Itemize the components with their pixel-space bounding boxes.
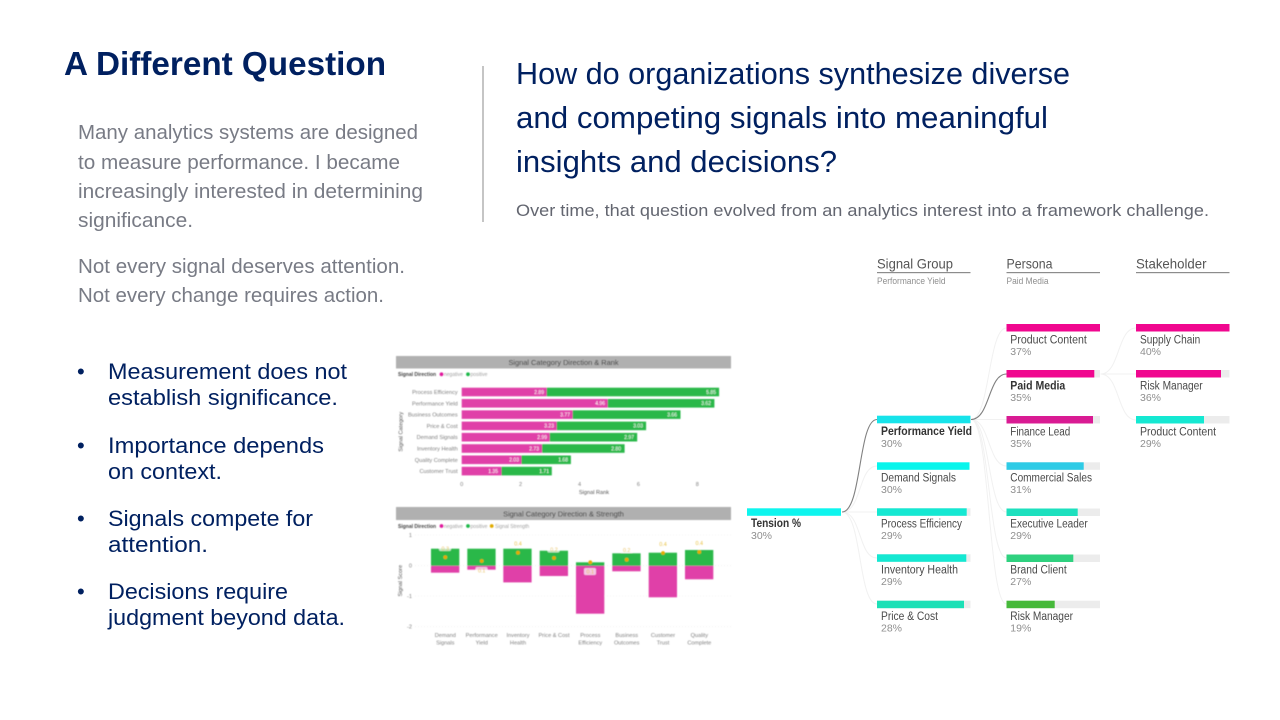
- axis labels: Signal Category: [398, 412, 404, 452]
- signal group column: 29%: [881, 530, 902, 542]
- column headers: Performance Yield: [877, 276, 946, 286]
- axis labels: Price & Cost: [427, 424, 458, 430]
- category labels: Customer: [651, 633, 675, 639]
- category labels: Demand: [435, 633, 456, 639]
- text block: intro paragraph: [78, 122, 423, 232]
- chart: signal category direction and strength: [396, 507, 731, 647]
- axis labels: 8: [696, 482, 699, 488]
- category labels: Yield: [476, 641, 488, 647]
- stacked bars: 2.03: [509, 458, 519, 464]
- stakeholder column: 36%: [1140, 392, 1161, 404]
- axis labels: Demand Signals: [417, 435, 458, 441]
- text block: signal statement: [78, 256, 405, 307]
- signal group column: Inventory Health: [881, 564, 958, 576]
- stakeholder column: Product Content: [1140, 426, 1217, 438]
- gridlines and axis: [398, 533, 731, 631]
- signal strength markers: 0.2: [623, 548, 630, 554]
- stakeholder column: [1136, 324, 1230, 450]
- signal group column: 28%: [881, 622, 902, 634]
- axis labels: 4: [578, 482, 581, 488]
- text block: intro paragraph: Many analytics systems are designed: [78, 122, 418, 144]
- axis labels: 2: [519, 482, 522, 488]
- stacked bars: 1.68: [558, 458, 568, 464]
- axis labels: Performance Yield: [412, 401, 458, 407]
- signal strength markers: 0.4: [514, 541, 522, 547]
- persona column: Product Content: [1010, 334, 1088, 346]
- heading: central question: [516, 56, 1070, 179]
- text block: intro paragraph: significance.: [78, 210, 193, 232]
- chart header: [396, 356, 731, 368]
- stacked bars: 2.97: [624, 435, 634, 441]
- signal group column: [877, 416, 972, 634]
- legend: [398, 524, 529, 530]
- bullet list: Importance depends: [108, 433, 324, 458]
- stacked bars: 2.89: [534, 390, 544, 396]
- signal group column: Process Efficiency: [881, 518, 962, 530]
- gridlines and axis: 1: [409, 533, 412, 539]
- bullet list: judgment beyond data.: [107, 605, 345, 630]
- stacked bars: 1.35: [488, 469, 498, 475]
- signal strength markers: 0.4: [659, 542, 667, 548]
- persona column: 37%: [1010, 346, 1031, 358]
- persona column: Finance Lead: [1010, 426, 1070, 438]
- signal strength markers: 0.3: [442, 546, 449, 552]
- stacked bars: 3.03: [633, 424, 643, 430]
- column headers: Persona: [1006, 256, 1053, 272]
- axis labels: Customer Trust: [419, 469, 458, 475]
- root node: Tension %: Tension %: [751, 518, 801, 530]
- gridlines and axis: Signal Score: [398, 565, 404, 597]
- stacked bars: 5.85: [706, 390, 716, 396]
- category labels: Price & Cost: [538, 633, 570, 639]
- category labels: Complete: [687, 641, 711, 647]
- category labels: Performance: [466, 633, 498, 639]
- legend: Signal Direction: [398, 372, 436, 378]
- category labels: Efficiency: [578, 641, 602, 647]
- persona column: Brand Client: [1010, 565, 1067, 577]
- heading: central question: and competing signals into meaningful: [516, 100, 1048, 135]
- heading: central question: How do organizations synthesize diverse: [516, 56, 1070, 91]
- persona column: 29%: [1010, 530, 1031, 542]
- positive and negative bars: [431, 549, 713, 614]
- stacked bars: [462, 388, 719, 475]
- heading: central question: insights and decisions?: [516, 144, 837, 179]
- legend: Signal Direction: [398, 524, 436, 530]
- legend: positive: [470, 372, 488, 378]
- column headers: Signal Group: [877, 256, 953, 272]
- stakeholder column: 40%: [1140, 346, 1161, 358]
- persona column: Risk Manager: [1010, 611, 1073, 623]
- persona column: 35%: [1010, 392, 1031, 404]
- bullet list: •: [77, 506, 85, 531]
- stacked bars: 3.62: [701, 401, 711, 407]
- stacked bars: 3.23: [544, 424, 554, 430]
- bullet list: Decisions require: [108, 579, 288, 604]
- text block: signal statement: Not every signal deserves attention.: [78, 256, 405, 278]
- signal strength markers: [439, 541, 703, 576]
- stacked bars: 3.77: [560, 412, 570, 418]
- category labels: [435, 633, 711, 647]
- persona column: 35%: [1010, 438, 1031, 450]
- axis labels: 6: [637, 482, 640, 488]
- persona column: Paid Media: [1010, 380, 1066, 392]
- category labels: Quality: [691, 633, 708, 639]
- connectors: [842, 328, 1136, 604]
- stacked bars: 2.80: [611, 446, 621, 452]
- signal strength markers: 0.1: [587, 570, 594, 576]
- gridlines and axis: -2: [407, 625, 412, 631]
- axis labels: Business Outcomes: [408, 413, 458, 419]
- category labels: Inventory: [506, 633, 530, 639]
- axis labels: [398, 390, 699, 496]
- persona column: Executive Leader: [1010, 519, 1088, 531]
- bullet list: establish significance.: [108, 385, 338, 410]
- axis labels: Inventory Health: [417, 446, 458, 452]
- text block: intro paragraph: to measure performance. I became: [78, 152, 400, 174]
- stakeholder column: Risk Manager: [1140, 380, 1203, 392]
- column headers: Paid Media: [1006, 276, 1048, 286]
- column headers: Stakeholder: [1136, 256, 1207, 272]
- persona column: 19%: [1010, 622, 1031, 634]
- bullet list: •: [77, 359, 85, 384]
- text block: question evolution: Over time, that question evolved from an analytics interest into a framework challenge.: [516, 201, 1209, 220]
- chart header: [396, 507, 731, 520]
- stakeholder column: Supply Chain: [1140, 334, 1200, 346]
- stacked bars: 4.96: [595, 401, 605, 407]
- legend: Signal Strength: [495, 524, 529, 530]
- stakeholder column: 29%: [1140, 438, 1161, 450]
- persona column: 27%: [1010, 576, 1031, 588]
- bullet list: on context.: [108, 459, 222, 484]
- legend: negative: [444, 372, 463, 378]
- chart header: Signal Category Direction & Rank: [508, 358, 619, 367]
- signal group column: 30%: [881, 438, 902, 450]
- stacked bars: 1.71: [539, 469, 549, 475]
- gridlines and axis: -1: [407, 594, 412, 600]
- category labels: Outcomes: [614, 641, 640, 647]
- signal group column: 30%: [881, 484, 902, 496]
- persona column: [1006, 324, 1100, 634]
- category labels: Business: [615, 633, 638, 639]
- chart header: Signal Category Direction & Strength: [503, 510, 624, 518]
- legend: [398, 372, 488, 378]
- stacked bars: 3.66: [667, 412, 677, 418]
- title: A Different Question: [64, 45, 386, 82]
- root node: Tension %: 30%: [751, 530, 772, 542]
- signal strength markers: 0.2: [550, 547, 558, 553]
- text block: signal statement: Not every change requires action.: [78, 285, 384, 307]
- category labels: Signals: [436, 641, 455, 647]
- stacked bars: 2.99: [537, 435, 547, 441]
- axis labels: 0: [460, 482, 463, 488]
- column headers: [877, 256, 1230, 286]
- bullet list: Signals compete for: [108, 506, 313, 531]
- legend: positive: [470, 524, 488, 530]
- text block: intro paragraph: increasingly interested in determining: [78, 181, 423, 203]
- signal group column: Price & Cost: [881, 611, 939, 623]
- bullet list: [77, 359, 347, 630]
- root node: Tension %: [747, 508, 841, 542]
- category labels: Trust: [657, 641, 670, 647]
- axis labels: Process Efficiency: [412, 390, 458, 396]
- category labels: Process: [580, 633, 601, 639]
- axis labels: Quality Complete: [415, 458, 458, 464]
- signal group column: Performance Yield: [881, 426, 972, 438]
- category labels: Health: [510, 641, 526, 647]
- signal group column: 29%: [881, 576, 902, 588]
- persona column: 31%: [1010, 484, 1031, 496]
- signal strength markers: 0.1: [478, 569, 485, 575]
- bullet list: Measurement does not: [108, 359, 347, 384]
- legend: negative: [444, 524, 463, 530]
- signal strength markers: 0.4: [696, 541, 703, 547]
- persona column: Commercial Sales: [1010, 472, 1092, 484]
- chart: signal category direction and rank: [396, 356, 731, 496]
- bullet list: •: [77, 579, 85, 604]
- bullet list: attention.: [108, 532, 208, 557]
- signal group column: Demand Signals: [881, 472, 956, 484]
- chart: decomposition tree: [747, 256, 1230, 634]
- stacked bars: 2.73: [529, 446, 539, 452]
- gridlines and axis: 0: [409, 564, 412, 570]
- axis labels: Signal Rank: [579, 490, 609, 496]
- bullet list: •: [77, 433, 85, 458]
